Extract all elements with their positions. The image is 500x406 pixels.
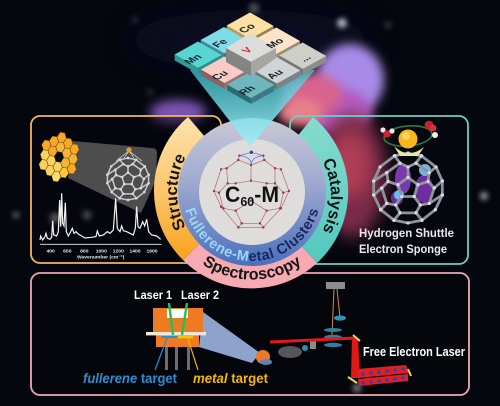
chart: spectrum: 1000 (96, 248, 107, 254)
title: C60-M: -M (254, 182, 279, 207)
text: catalysis roles: Electron Sponge (359, 242, 447, 256)
chart: spectrum: 1600 (146, 248, 158, 254)
chart: spectrum (40, 193, 162, 261)
icon: gold hexagon mirror (37, 130, 81, 184)
chart: spectrum: 1200 (113, 248, 124, 254)
central ring diagram (154, 117, 348, 288)
tile labels: Cu (209, 69, 232, 82)
tile labels (182, 22, 314, 97)
icon: fullerene with metal atom (107, 147, 149, 200)
segment: spectroscopy (183, 192, 317, 288)
label: catalysis: Catalysis (324, 158, 343, 233)
beam: cyan cone from tiles to core (190, 70, 315, 147)
tile top faces (175, 12, 326, 98)
icon: metal atom with hydrogen shuttle (380, 121, 438, 156)
text: free electron laser: Free Electron Laser (363, 345, 465, 359)
tiles geometry (169, 12, 332, 104)
tile labels: Mn (182, 53, 205, 66)
beam from source to chamber (199, 312, 260, 363)
chart: spectrum: 400 (46, 248, 55, 254)
icon: fullerene with purple orbitals (374, 153, 442, 223)
text: laser labels: Laser 1 (134, 288, 172, 302)
tile labels: Fe (210, 37, 231, 50)
chart: spectrum: 1400 (129, 248, 141, 254)
tile labels: Mo (264, 36, 288, 50)
chart: spectrum: Wavenumber (cm⁻¹) (77, 255, 125, 261)
text: laser labels: Laser 2 (181, 288, 219, 302)
icon: C60 cage (214, 151, 289, 227)
title: C60-M: 60 (240, 194, 254, 209)
icon: undulator (357, 365, 411, 386)
segment: structure (154, 117, 252, 260)
tile labels: Rh (236, 84, 259, 97)
text: catalysis roles (359, 226, 454, 256)
arrow: free electron laser beam path (270, 335, 361, 392)
text: catalysis roles: Hydrogen Shuttle (359, 226, 454, 240)
label: spectroscopy: Spectroscopy (204, 256, 300, 280)
title: C60-M: C (225, 182, 241, 207)
panel: spectroscopy setup (31, 273, 469, 395)
tile: V raised (226, 33, 276, 76)
core circle (199, 139, 305, 245)
chart: spectrum: 800 (80, 248, 89, 254)
text: laser labels (134, 288, 219, 302)
tile labels: Co (236, 22, 259, 35)
text: fullerene target: fullerene target (83, 370, 177, 386)
text: metal target: metal target (193, 370, 268, 386)
panel: metal tiles (169, 12, 332, 104)
panel: structure (31, 116, 221, 263)
label: structure: Structure (166, 154, 185, 230)
tile labels: V (239, 46, 256, 55)
panel: catalysis (290, 116, 468, 264)
icon: ion optics and detector (324, 282, 346, 347)
tile labels: Au (264, 68, 287, 81)
label: fullerene-metal clusters: Fullerene-Metal Clusters (186, 208, 318, 262)
tile labels: ... (296, 53, 314, 64)
chart: spectrum: 600 (63, 248, 72, 254)
zoom beam to fullerene (68, 141, 157, 213)
icon: laser vaporization source (146, 303, 206, 370)
segment: catalysis (252, 117, 348, 263)
icon: cluster chamber (256, 341, 316, 365)
ring: fullerene-metal clusters (178, 118, 326, 266)
tile side faces (169, 12, 332, 104)
